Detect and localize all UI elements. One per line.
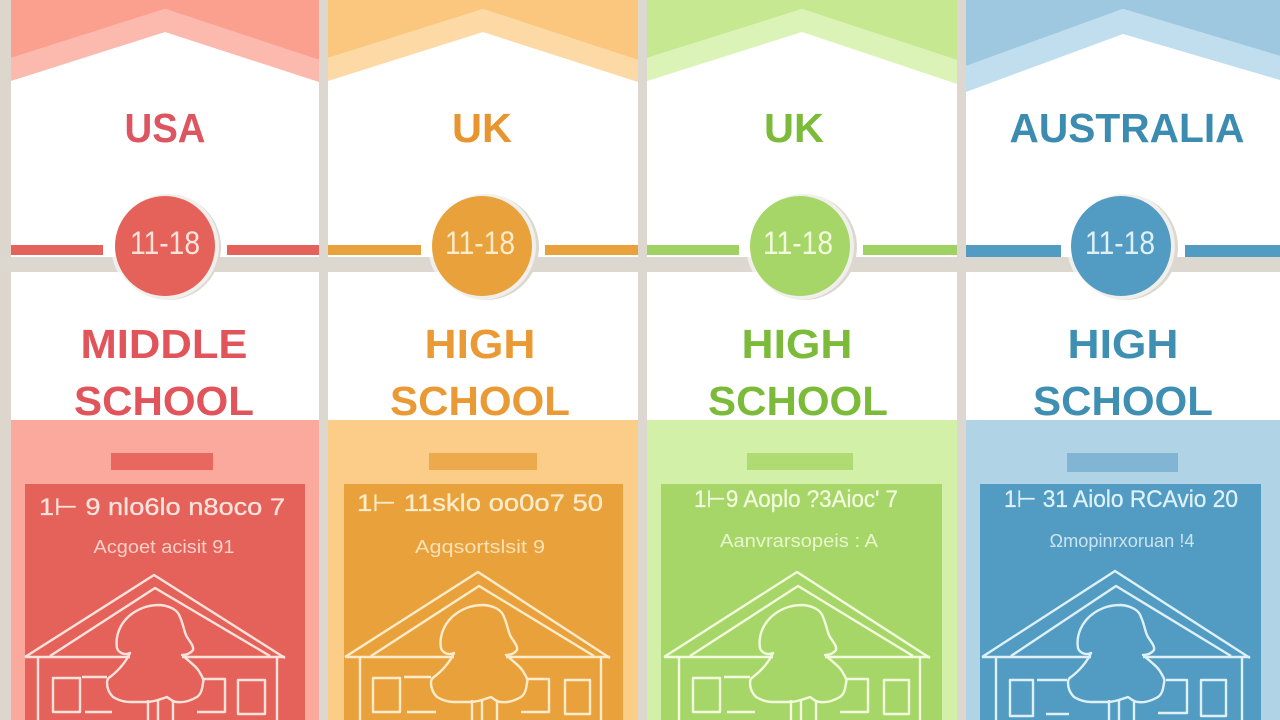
label bar	[1067, 453, 1178, 472]
card text: 1⊢ 9 nlo6lo n8oco 7	[39, 494, 285, 521]
school type heading	[74, 321, 254, 424]
lower panel background	[647, 420, 957, 720]
school type heading	[1033, 321, 1213, 424]
info card	[344, 484, 623, 720]
card text: Acgoet acisit 91	[94, 537, 234, 557]
panel: Australia	[966, 0, 1280, 720]
school type heading: HIGH	[742, 321, 852, 367]
lower panel background	[11, 420, 319, 720]
country heading: USA	[124, 105, 206, 151]
age badge	[428, 192, 539, 300]
timeline line	[328, 245, 638, 255]
card text	[694, 486, 898, 551]
label bar	[747, 453, 853, 470]
card text: 1⊢ 11sklo oo0o7 50	[357, 490, 603, 517]
age badge: 11-18	[1085, 225, 1155, 261]
info card	[980, 484, 1261, 720]
card text	[1004, 486, 1238, 551]
age badge: 11-18	[763, 225, 833, 261]
lower panel background	[328, 420, 638, 720]
timeline line	[966, 245, 1280, 257]
card text	[39, 494, 285, 557]
school type heading: SCHOOL	[390, 378, 570, 424]
roof band	[328, 0, 638, 82]
info card	[25, 484, 305, 720]
school type heading: SCHOOL	[1033, 378, 1213, 424]
card text: 1⊢9 Aoplo ?3Aioc' 7	[694, 486, 898, 513]
country heading: AUSTRALIA	[1010, 105, 1244, 151]
school type heading: SCHOOL	[74, 378, 254, 424]
school type heading	[708, 321, 888, 424]
icon: school and tree	[664, 572, 930, 720]
icon: school and tree	[345, 572, 610, 720]
age badge: 11-18	[130, 225, 200, 261]
panel: UK orange	[328, 0, 638, 720]
school type heading	[390, 321, 570, 424]
panel: UK green	[647, 0, 957, 720]
panel: USA	[11, 0, 319, 720]
timeline line	[11, 245, 319, 255]
card text: 1⊢ 31 Aiolo RCAvio 20	[1004, 486, 1238, 513]
country heading: UK	[452, 105, 512, 151]
school type heading: MIDDLE	[80, 321, 248, 367]
card text: Agqsortslsit 9	[415, 537, 545, 557]
lower panel background	[966, 420, 1280, 720]
icon: school and tree	[982, 571, 1250, 720]
age badge	[1067, 192, 1178, 300]
icon: school and tree	[25, 575, 285, 720]
country heading: UK	[764, 105, 824, 151]
school type heading: HIGH	[424, 321, 536, 367]
info card	[661, 484, 942, 720]
timeline line	[647, 245, 957, 255]
age badge: 11-18	[445, 225, 515, 261]
school type heading: HIGH	[1068, 321, 1178, 367]
age badge	[746, 192, 857, 300]
card text: Aanvrarsopeis : A	[720, 531, 878, 551]
school type heading: SCHOOL	[708, 378, 888, 424]
card text: Ωmopinrxoruan !4	[1050, 531, 1194, 551]
label bar	[429, 453, 537, 470]
roof band	[647, 0, 957, 84]
card text	[357, 490, 603, 557]
roof band	[966, 0, 1280, 92]
age badge	[111, 192, 221, 300]
roof band	[11, 0, 319, 82]
label bar	[111, 453, 213, 470]
